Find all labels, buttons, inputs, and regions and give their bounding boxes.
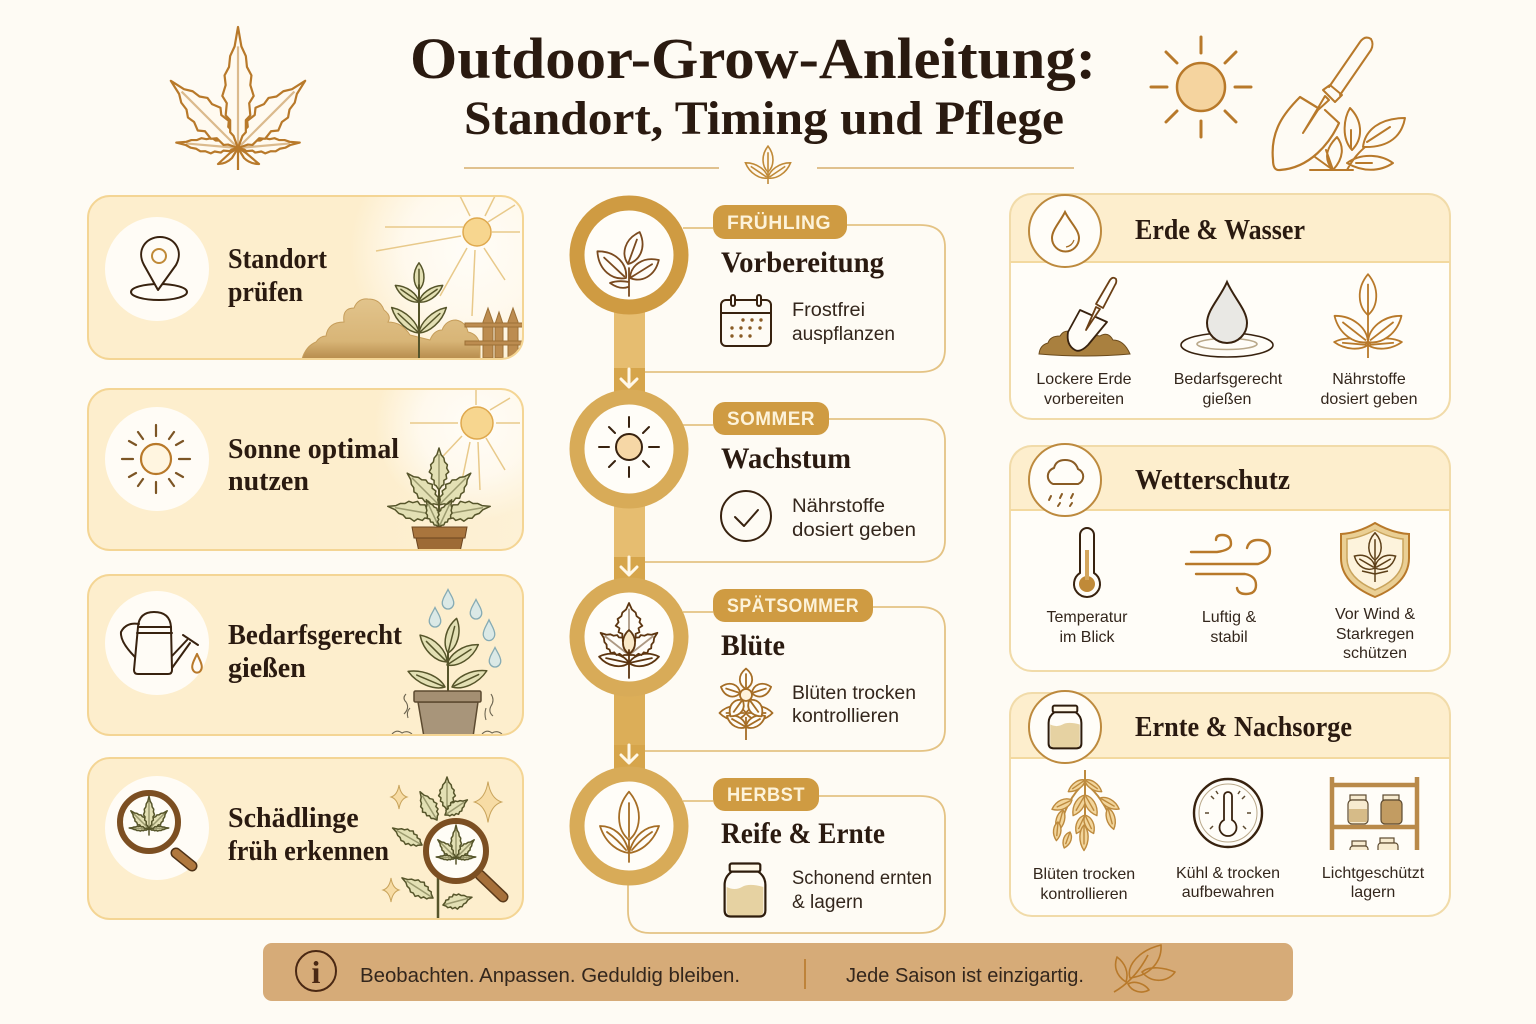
footer banner bbox=[263, 943, 1293, 1001]
panel: Schädlinge früh erkennen: früh erkennen bbox=[228, 836, 389, 867]
panel: Ernte & Nachsorge: Blüten trocken bbox=[1033, 866, 1135, 883]
panel: Sommer: Nährstoffe bbox=[792, 496, 885, 517]
panel: Bedarfsgerecht gießen: Bedarfsgerecht bbox=[228, 620, 403, 651]
panel: Herbst: & lagern bbox=[792, 892, 863, 913]
panel: Herbst: Schonend ernten bbox=[792, 868, 932, 889]
panel: Ernte & Nachsorge: kontrollieren bbox=[1040, 886, 1128, 903]
panel: Sommer: dosiert geben bbox=[792, 520, 916, 541]
label: Sommer: SOMMER bbox=[727, 409, 815, 430]
icon: water drop bbox=[1052, 212, 1079, 252]
panel: Wetterschutz: im Blick bbox=[1059, 629, 1116, 646]
icon: flowering plant bbox=[595, 603, 663, 678]
icon: magnifier bbox=[120, 793, 192, 866]
icon: hanging dried plant bbox=[1050, 770, 1121, 850]
panel: Erde & Wasser bbox=[1010, 194, 1450, 419]
title: Standort, Timing und Pflege bbox=[464, 92, 1064, 145]
panel: Bedarfsgerecht gießen: gießen bbox=[228, 653, 306, 684]
panel: Spätsommer: kontrollieren bbox=[792, 706, 899, 727]
title bbox=[410, 26, 1096, 145]
panel: Wetterschutz: Wetterschutz bbox=[1135, 465, 1290, 496]
icon: sprig bbox=[591, 229, 663, 296]
icon: storage shelf bbox=[1332, 777, 1417, 861]
icon: leaf sprig bbox=[1114, 945, 1175, 992]
icon: sun bbox=[122, 425, 190, 493]
panel: Erde & Wasser: Lockere Erde bbox=[1036, 371, 1132, 388]
panel: Schädlinge früh erkennen bbox=[88, 758, 523, 919]
panel: Wetterschutz: Luftig & bbox=[1202, 609, 1256, 626]
panel: Bedarfsgerecht gießen bbox=[88, 575, 523, 737]
panel: Ernte & Nachsorge bbox=[1010, 691, 1450, 916]
footer banner: Beobachten. Anpassen. Geduldig bleiben. bbox=[360, 965, 740, 987]
panel: Herbst: Reife & Ernte bbox=[721, 817, 885, 850]
panel: Frühling: auspflanzen bbox=[792, 324, 895, 345]
panel: Spätsommer bbox=[577, 585, 945, 751]
panel: Standort prüfen: Standort bbox=[228, 244, 328, 275]
panel: Erde & Wasser: vorbereiten bbox=[1044, 391, 1124, 408]
panel: Standort prüfen: prüfen bbox=[228, 277, 303, 308]
panel: Spätsommer: Blüten trocken bbox=[792, 683, 916, 704]
panel: Ernte & Nachsorge: lagern bbox=[1351, 884, 1395, 901]
panel: Frühling bbox=[577, 203, 945, 372]
panel: Sonne optimal nutzen: Sonne optimal bbox=[228, 434, 399, 465]
panel: Sonne optimal nutzen: nutzen bbox=[228, 466, 309, 497]
icon: cannabis leaf bbox=[159, 27, 317, 170]
label: Herbst: HERBST bbox=[727, 785, 805, 806]
panel: Erde & Wasser: Erde & Wasser bbox=[1135, 215, 1305, 246]
panel: Frühling: Frostfrei bbox=[792, 300, 865, 321]
icon: thermometer bbox=[1074, 528, 1100, 597]
icon: calendar bbox=[721, 295, 771, 346]
icon: check circle bbox=[721, 491, 771, 541]
panel: Wetterschutz: stabil bbox=[1210, 629, 1248, 646]
panel: Wetterschutz: Starkregen bbox=[1336, 626, 1414, 643]
panel: Herbst bbox=[577, 774, 945, 933]
icon: watering can bbox=[121, 612, 202, 674]
icon: plant bbox=[600, 792, 659, 862]
icon: drop on water bbox=[1181, 282, 1273, 357]
icon: info: i bbox=[312, 954, 321, 990]
panel: Ernte & Nachsorge: Lichtgeschützt bbox=[1322, 865, 1425, 882]
panel: Sonne optimal nutzen bbox=[87, 388, 524, 551]
icon: rain cloud bbox=[1048, 460, 1083, 506]
icon: temperature gauge bbox=[1194, 779, 1262, 847]
divider with sprig bbox=[464, 146, 1074, 184]
panel: Frühling: Vorbereitung bbox=[721, 246, 884, 279]
panel: Ernte & Nachsorge: Ernte & Nachsorge bbox=[1135, 712, 1352, 743]
icon: flower bbox=[719, 669, 773, 740]
panel: Erde & Wasser: dosiert geben bbox=[1321, 391, 1417, 408]
icon: sun bbox=[599, 417, 659, 477]
icon: jar bbox=[725, 863, 765, 917]
panel: Sommer: Wachstum bbox=[721, 442, 851, 475]
panel: Schädlinge früh erkennen: Schädlinge bbox=[228, 803, 359, 834]
panel: Wetterschutz: Vor Wind & bbox=[1335, 606, 1415, 623]
panel: Spätsommer: Blüte bbox=[721, 629, 785, 662]
title: Outdoor-Grow-Anleitung: bbox=[410, 26, 1096, 91]
icon: shield bbox=[1341, 523, 1409, 597]
footer banner: Jede Saison ist einzigartig. bbox=[846, 965, 1084, 987]
icon: trowel in soil bbox=[1039, 278, 1130, 356]
panel: Wetterschutz: schützen bbox=[1343, 645, 1407, 662]
icon: nutrient sprig bbox=[1329, 274, 1407, 358]
icon: wind bbox=[1186, 535, 1270, 594]
timeline connector bbox=[614, 300, 645, 780]
panel: Wetterschutz: Temperatur bbox=[1047, 609, 1128, 626]
panel: Ernte & Nachsorge: aufbewahren bbox=[1182, 884, 1274, 901]
panel: Erde & Wasser: Nährstoffe bbox=[1332, 371, 1406, 388]
panel: Wetterschutz bbox=[1010, 444, 1450, 671]
panel: Standort prüfen bbox=[87, 195, 524, 360]
icon: info bbox=[296, 951, 336, 991]
panel: Erde & Wasser: Bedarfsgerecht bbox=[1174, 371, 1283, 388]
icon: sun bbox=[1151, 37, 1251, 137]
panel: Sommer bbox=[577, 397, 945, 562]
label: Spätsommer: SPÄTSOMMER bbox=[727, 596, 859, 617]
icon: jar bbox=[1049, 706, 1081, 748]
icon: location pin bbox=[131, 237, 187, 300]
panel: Erde & Wasser: gießen bbox=[1203, 391, 1251, 408]
panel: Ernte & Nachsorge: Kühl & trocken bbox=[1176, 865, 1280, 882]
label: Frühling: FRÜHLING bbox=[727, 213, 831, 234]
icon: trowel with leaves bbox=[1273, 38, 1405, 170]
